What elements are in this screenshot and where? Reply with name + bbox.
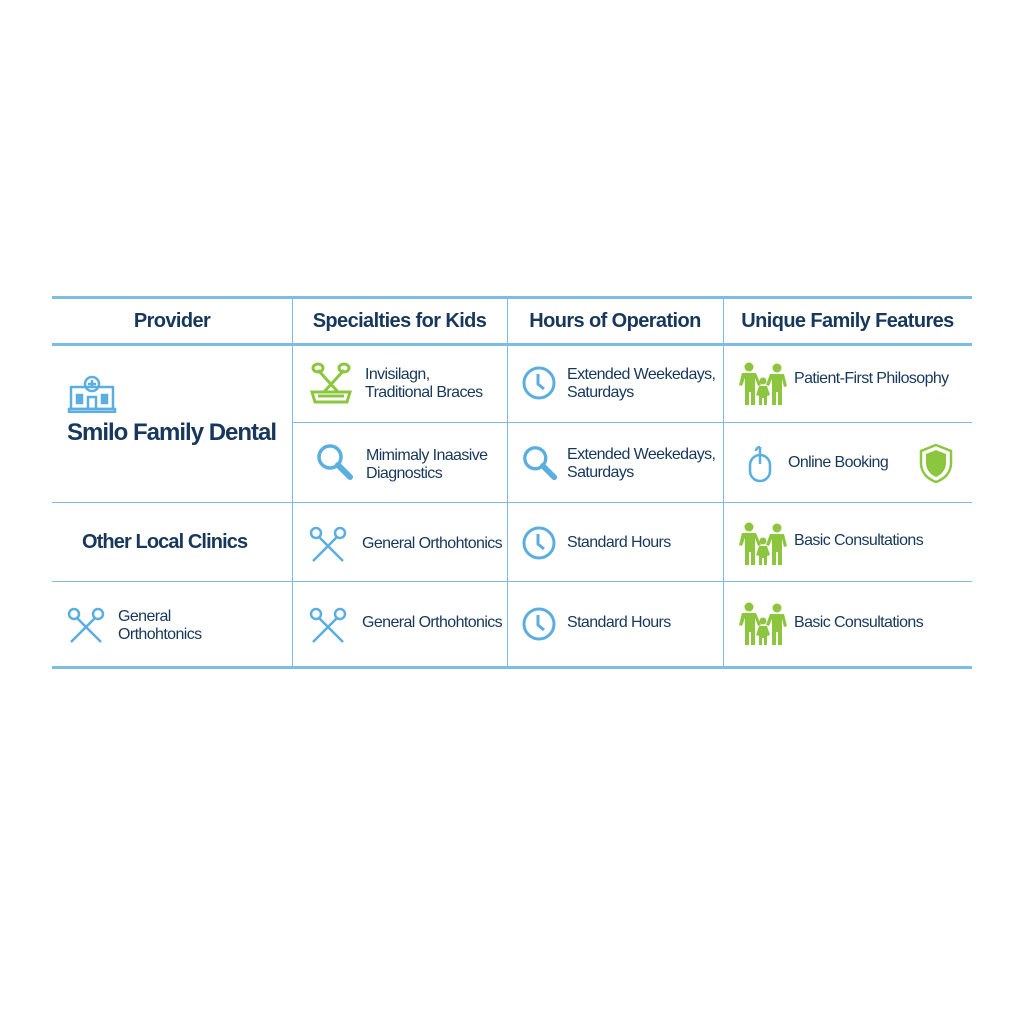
icon: clinic building [68, 376, 116, 413]
cell: hours 1: Extended Weekedays, [567, 366, 715, 383]
header: Hours: Hours of Operation [529, 310, 701, 332]
provider: Other: Other Local Clinics [82, 531, 247, 553]
cell: hours 3: Standard Hours [567, 534, 671, 551]
header: Provider: Provider [134, 310, 210, 332]
cell: basic consultations 1: Basic Consultations [794, 532, 923, 549]
cell: basic consultations 2: Basic Consultations [794, 614, 923, 631]
cell: general ortho 1 [310, 526, 502, 562]
cell: online booking: Online Booking [788, 454, 888, 471]
cell: braces [310, 362, 483, 404]
header: Features: Unique Family Features [741, 310, 954, 332]
icon: tools + text: General [118, 608, 171, 625]
cell: general ortho 2 [310, 608, 502, 643]
provider: Smilo: Smilo Family Dental [67, 419, 276, 446]
cell: hours 2: Saturdays [567, 464, 634, 481]
cell: diagnostics [317, 444, 488, 482]
cell: hours 1: Saturdays [567, 384, 634, 401]
cell: general ortho 2: General Orthohtonics [362, 614, 502, 631]
cell: hours 1 [522, 366, 715, 401]
cell: diagnostics: Diagnostics [366, 465, 442, 482]
cell: hours 4: Standard Hours [567, 614, 671, 631]
cell: diagnostics: Mimimaly Inaasive [366, 447, 487, 464]
header: Specialties: Specialties for Kids [313, 310, 486, 332]
icon: tools + text: Orthohtonics [118, 626, 202, 643]
cell: hours 3 [522, 526, 671, 560]
cell: hours 2 [523, 446, 715, 481]
cell: basic consultations 1 [739, 522, 924, 565]
cell: online booking [748, 444, 952, 483]
cell: hours 2: Extended Weekedays, [567, 446, 715, 463]
cell: hours 4 [522, 608, 671, 640]
cell: braces: Invisilagn, [365, 366, 430, 383]
cell: patient-first: Patient-First Philosophy [794, 370, 949, 387]
cell: general ortho 1: General Orthohtonics [362, 535, 502, 552]
cell: basic consultations 2 [739, 602, 924, 645]
cell: patient-first [739, 362, 950, 405]
cell: braces: Traditional Braces [365, 384, 483, 401]
icon: tools + text [68, 608, 202, 643]
